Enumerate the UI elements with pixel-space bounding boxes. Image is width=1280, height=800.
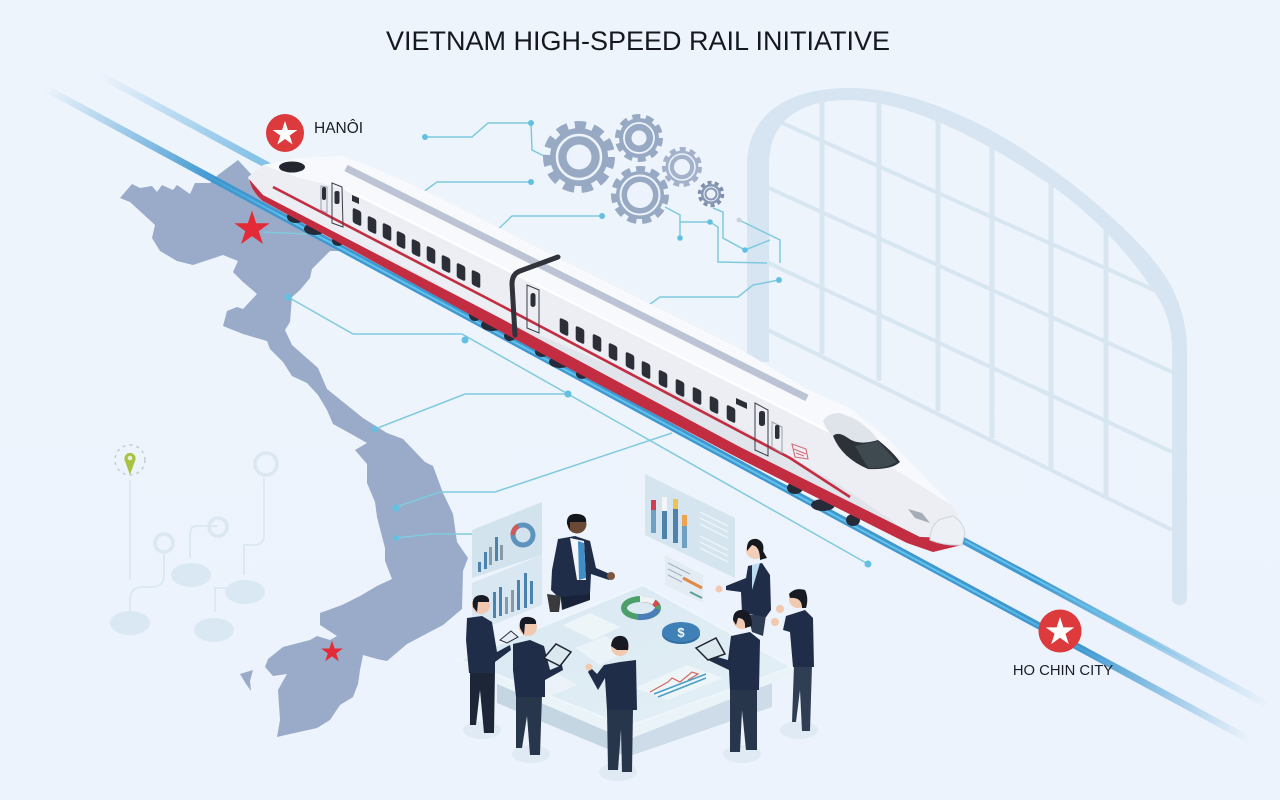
presenter hand: [607, 572, 615, 580]
team meeting scene: [460, 474, 818, 781]
table papers: [520, 613, 723, 700]
presenter torso: [551, 536, 612, 597]
island: [240, 670, 253, 691]
network rings: [155, 453, 277, 552]
shadow 2: [512, 745, 550, 763]
arch grid: [760, 95, 1172, 530]
person: centre man: [586, 636, 637, 781]
gear 3: [664, 149, 700, 185]
torso 3: [588, 660, 637, 710]
nose cap: [930, 516, 965, 545]
high-speed train: [248, 156, 965, 552]
legs 5: [792, 665, 812, 731]
woman skirt: [748, 615, 766, 636]
presenter legs: [560, 590, 590, 610]
person: right man 2: [771, 589, 818, 739]
chart panel right: [645, 474, 735, 578]
table blue trend: [654, 674, 706, 697]
table top: [460, 585, 792, 727]
doors: [321, 183, 782, 456]
table donut chart: [624, 599, 658, 617]
person: presenter: [547, 514, 615, 612]
roof band: [263, 156, 953, 506]
legs 3: [607, 710, 633, 772]
shadow 1: [463, 721, 501, 739]
head 5: [789, 589, 807, 608]
map of Vietnam: [120, 160, 468, 737]
table rim: [460, 660, 792, 740]
red stripe: [273, 187, 850, 497]
roof highlight: [345, 189, 840, 437]
map star: Hanoi: [234, 210, 270, 244]
second car windows: [560, 317, 735, 424]
connector lines: [263, 120, 872, 568]
woman hand: [716, 586, 722, 592]
title: VIETNAM HIGH-SPEED RAIL INITIATIVE: [386, 26, 890, 56]
network arrows: [130, 478, 264, 620]
headlight: [908, 509, 930, 523]
chart panel left top: [472, 502, 542, 578]
logo: [792, 444, 808, 459]
windshield: [833, 434, 900, 469]
windshield panel: [855, 441, 897, 468]
shadow 4: [723, 745, 761, 763]
pin: Hanoi: [266, 114, 304, 152]
gear 1: [547, 125, 611, 189]
train body: [248, 156, 965, 552]
rails: [45, 75, 1270, 740]
arch frame: [747, 88, 1187, 606]
head 3: [611, 636, 629, 656]
shadow 5: [780, 721, 818, 739]
station arch: [747, 88, 1187, 606]
gear 4: [614, 169, 666, 221]
woman torso: [726, 563, 771, 617]
report panel: [665, 555, 703, 603]
head 1: [472, 595, 490, 614]
person: woman: [716, 539, 771, 636]
driver hatch: [279, 162, 305, 172]
label: Ho Chi Minh: HO CHIN CITY: [1013, 663, 1113, 679]
first car windows: [353, 207, 480, 289]
Hanoi marker: [266, 114, 363, 152]
table base: [497, 680, 772, 757]
tablet 1: [500, 631, 518, 643]
torso 1: [466, 616, 511, 673]
person: left man 1: [463, 595, 518, 739]
gear 5: [700, 182, 722, 206]
label: Hanoi: HANÔI: [314, 120, 363, 137]
gangway: [512, 257, 558, 335]
shadow 3: [599, 763, 637, 781]
person: right man 1: [696, 610, 761, 763]
icon: location pin: [115, 445, 145, 475]
torso 4: [708, 632, 760, 690]
hand 3: [586, 664, 592, 670]
woman shirt: [752, 563, 760, 590]
torso 5: [783, 610, 814, 667]
legs 4: [730, 688, 757, 752]
head 2: [519, 617, 537, 636]
lower rail: [45, 88, 1250, 740]
chart panel left bottom: [472, 555, 542, 625]
tablet 4: [696, 638, 725, 660]
network nodes: [110, 563, 265, 642]
connector dots: [284, 120, 872, 568]
legs 1: [470, 670, 495, 733]
table line chart: [650, 672, 698, 692]
torso 2: [513, 640, 563, 697]
map star: Ho Chi Minh: [321, 640, 343, 661]
background network diagram: [110, 445, 277, 642]
pin: Ho Chi Minh: [1038, 610, 1082, 652]
red lower band: [249, 179, 962, 552]
roof stripe: [346, 168, 807, 398]
woman head: [746, 539, 767, 560]
head 4: [733, 610, 752, 629]
tablet 2: [544, 644, 571, 666]
wheels: [287, 211, 860, 526]
person: left man 2: [512, 617, 571, 763]
upper rail: [100, 75, 1270, 706]
windshield surround: [823, 413, 878, 445]
gears: [547, 116, 722, 221]
Ho Chi Minh marker: [1013, 610, 1113, 679]
mainland: [120, 160, 468, 737]
presenter briefcase: [547, 594, 561, 612]
hands 5: [771, 605, 784, 626]
presenter head: [567, 514, 586, 534]
gear 2: [618, 116, 660, 160]
presenter shirt and tie: [570, 538, 586, 580]
lower grey shading: [300, 210, 930, 545]
legs 2: [516, 695, 542, 755]
dollar coin: $: [677, 625, 685, 640]
dollar coin: [662, 622, 700, 644]
